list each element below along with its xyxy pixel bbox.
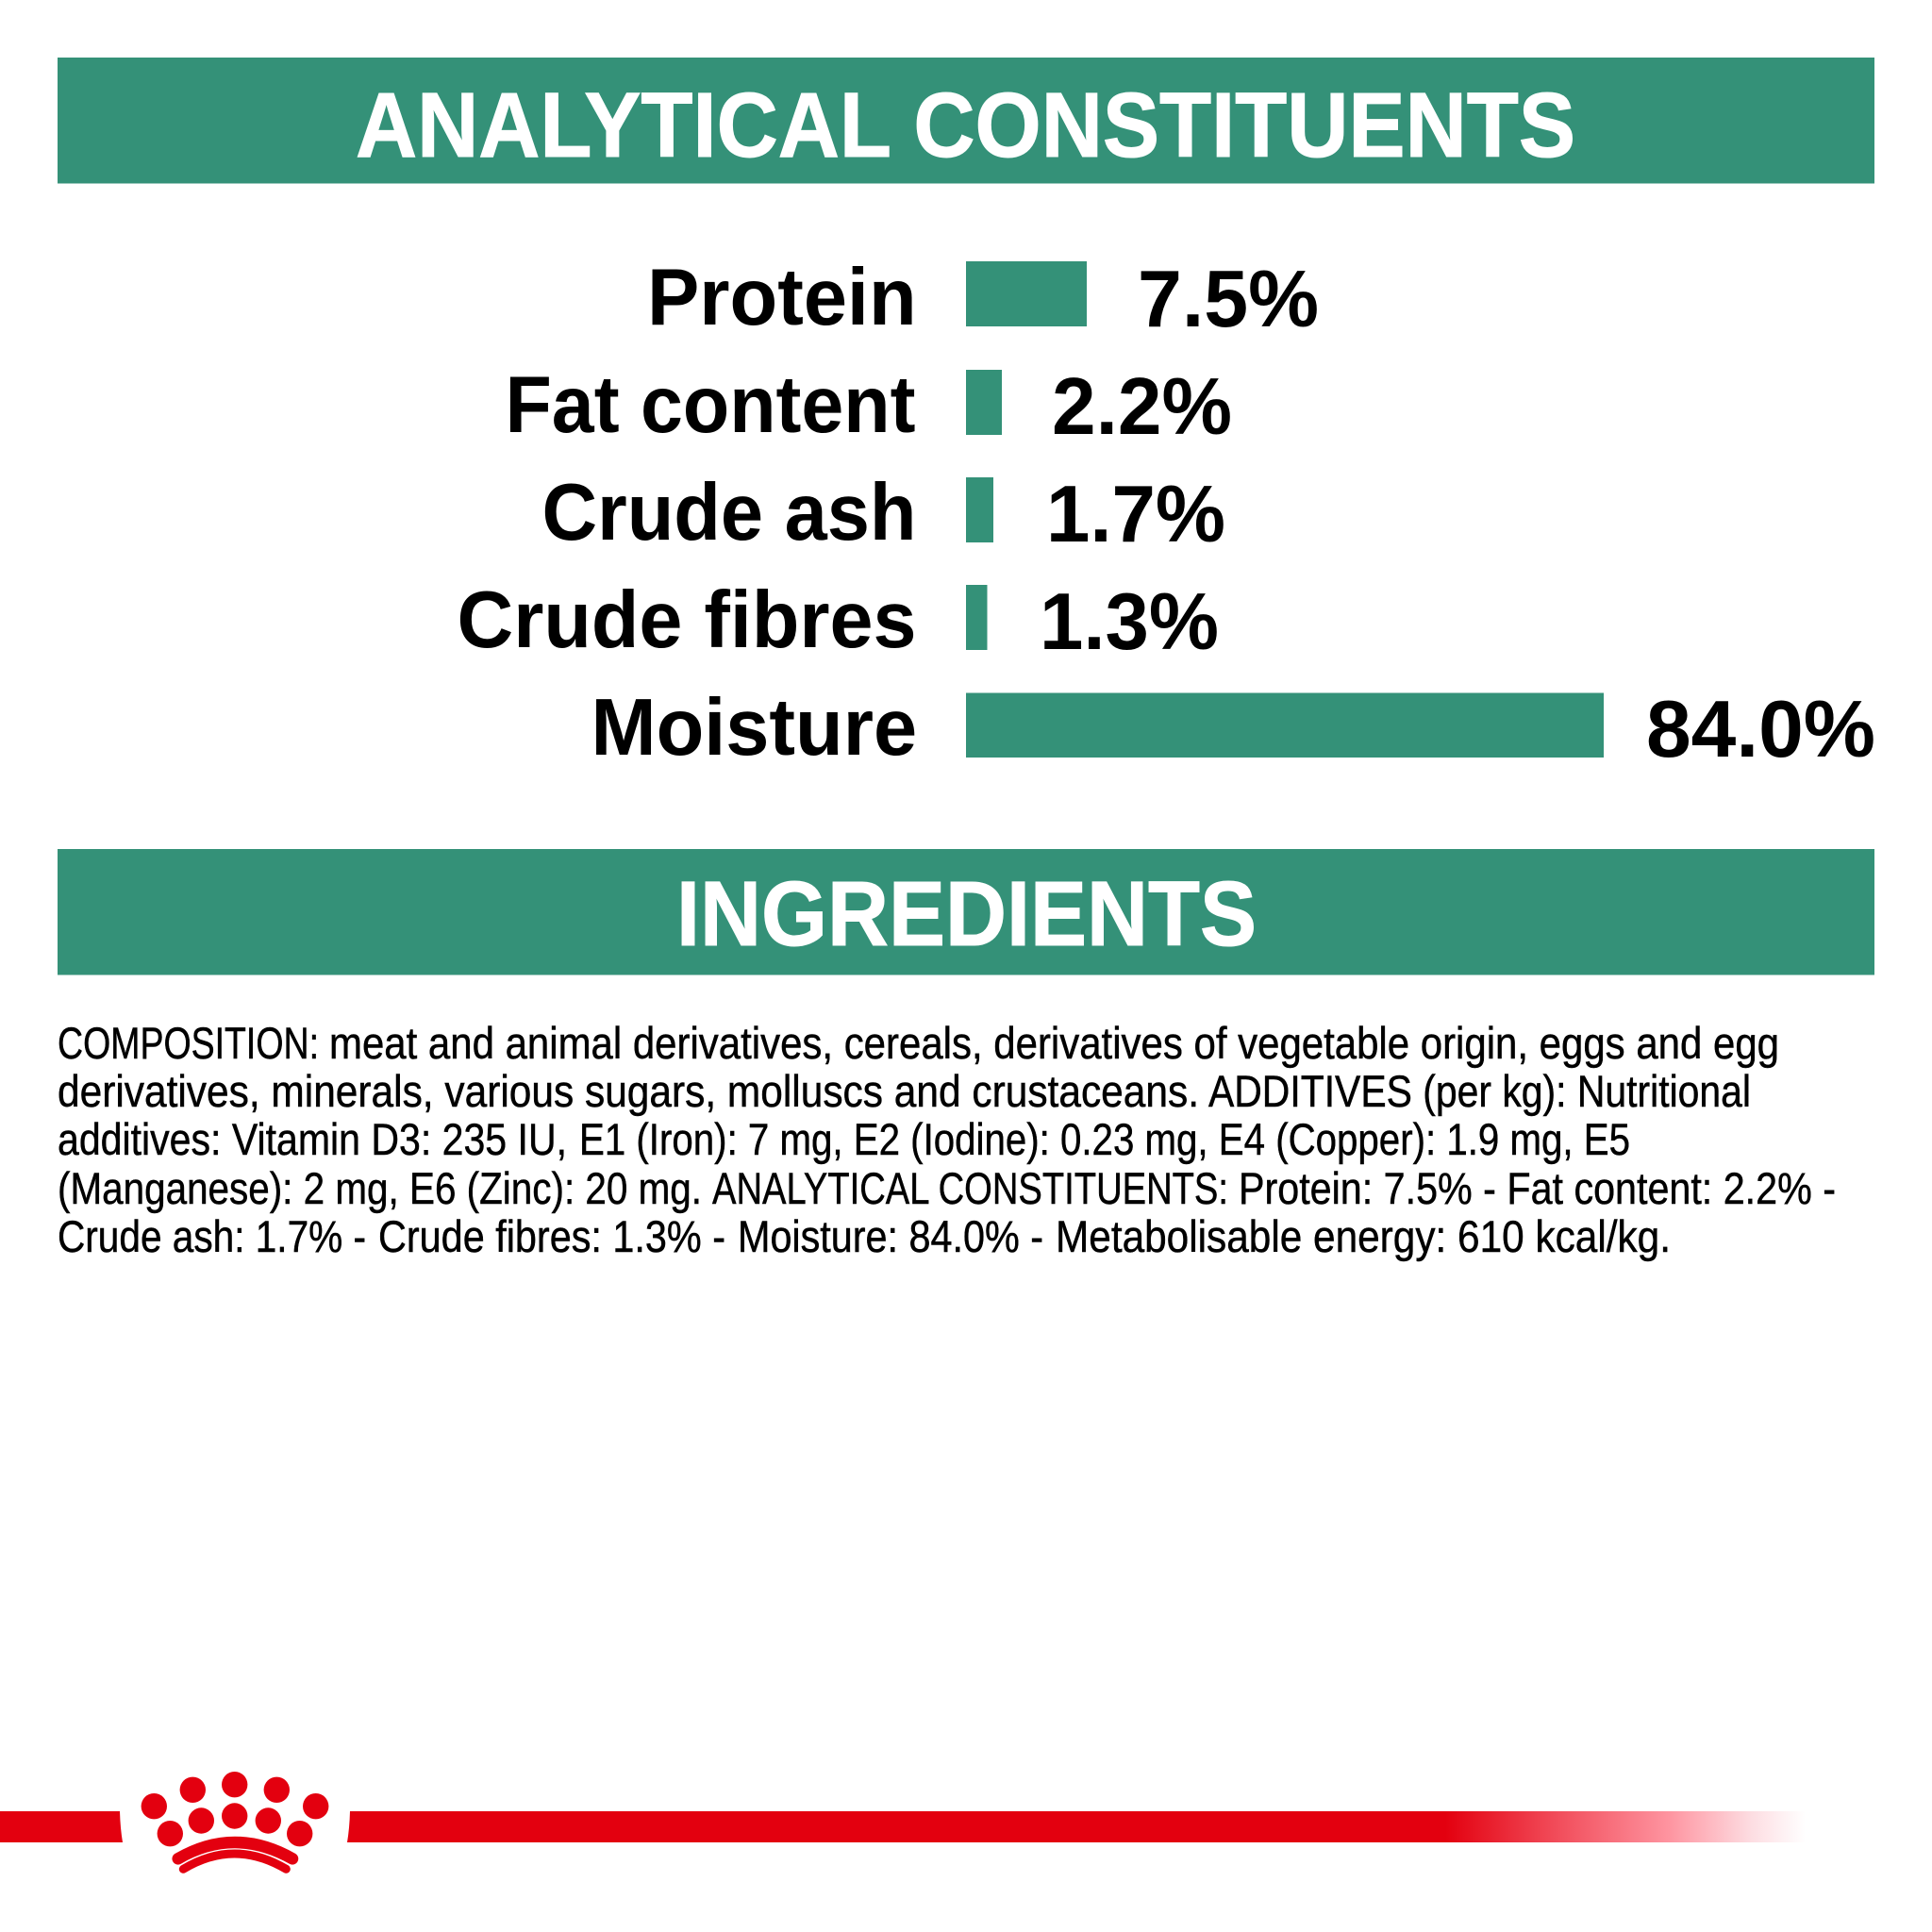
row: crude ash: [541, 468, 1225, 559]
text block: composition: E1 (Iron): 7 mg, E2 (Iodine): 0.23 mg, E4 (Copper): 1.9 mg, E5: [579, 1114, 1630, 1164]
icon: royal canin crown logo: [142, 1772, 328, 1869]
text block: composition: (Manganese): 2 mg, E6 (Zinc): 20 mg.: [58, 1163, 702, 1213]
row: protein: Protein: [647, 253, 917, 342]
row: crude ash: Crude ash: [541, 468, 917, 558]
text block: composition: Moisture: 84.0% -: [738, 1211, 1043, 1261]
text block: composition: derivatives, minerals, various sugars, molluscs and crustaceans.: [58, 1066, 1199, 1116]
footer band: red line left: [0, 1811, 123, 1842]
row: fat content: [506, 360, 1232, 452]
row: moisture: [591, 683, 1875, 774]
text block: composition: ANALYTICAL CONSTITUENTS:: [712, 1163, 1228, 1213]
row: protein: [647, 253, 1319, 344]
text block: composition: [58, 1018, 1836, 1261]
heading banner: analytical constituents: ANALYTICAL CONSTITUENTS: [356, 74, 1575, 176]
text block: composition: ADDITIVES (per kg): Nutritional: [1208, 1066, 1751, 1116]
bar chart: analytical constituents: [457, 253, 1875, 774]
row: fat content: Fat content: [506, 360, 915, 450]
row: protein: 7.5%: [1138, 255, 1319, 344]
footer band: red line right with fade: [347, 1811, 1806, 1842]
row: fat content: 2.2%: [1052, 362, 1232, 452]
row: moisture: Moisture: [591, 683, 917, 773]
row: moisture: 84.0%: [1646, 685, 1875, 774]
text block: composition: Crude ash: 1.7% -: [58, 1211, 366, 1261]
text block: composition: Metabolisable energy: 610 kcal/kg.: [1056, 1211, 1671, 1261]
text block: composition: Crude fibres: 1.3% -: [378, 1211, 725, 1261]
text block: composition: COMPOSITION:: [58, 1018, 319, 1068]
row: crude ash: 1.7%: [1046, 470, 1225, 559]
heading banner: analytical constituents: [58, 58, 1874, 183]
text block: composition: Protein: 7.5% - Fat content: 2.2% -: [1239, 1163, 1836, 1213]
row: crude fibres: [457, 575, 1219, 667]
row: crude fibres: 1.3%: [1040, 577, 1219, 667]
text block: composition: meat and animal derivatives, cereals, derivatives of vegetable origin, eggs and egg: [329, 1018, 1779, 1068]
text block: composition: additives: Vitamin D3: 235 IU,: [58, 1114, 567, 1164]
row: crude fibres: Crude fibres: [457, 575, 917, 665]
heading banner: ingredients: INGREDIENTS: [676, 862, 1257, 965]
heading banner: ingredients: [58, 849, 1874, 975]
